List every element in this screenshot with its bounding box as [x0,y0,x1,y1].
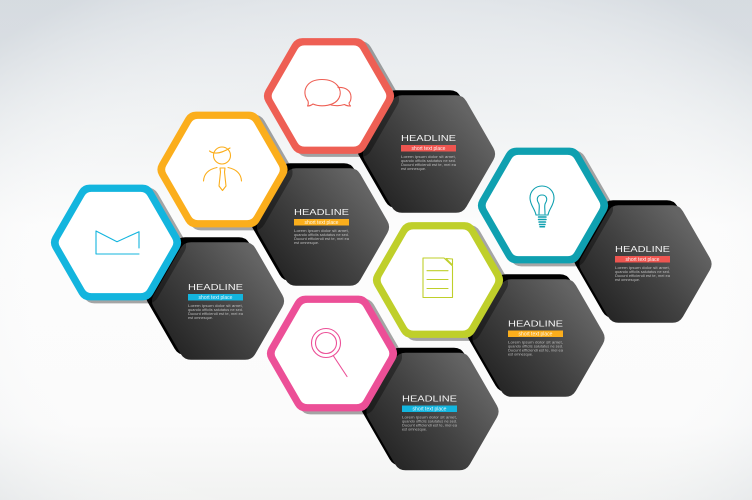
text: teal headline block: Lorem ipsum dolor sit amet, [615,266,670,270]
text: yellow headline block [294,208,349,245]
text: coral headline block: quando officiis salutatus ne sed. [401,159,456,163]
text: coral headline block: short text place [412,146,446,152]
text: pink headline block [402,394,457,431]
panel: coral hexagon with chat icon [276,50,387,145]
text: teal headline block: quando officiis salutatus ne sed. [615,270,670,274]
text: green headline block: Lorem ipsum dolor sit amet, [508,341,563,345]
text: pink headline block: Lorem ipsum dolor sit amet, [402,416,457,420]
panel: dark hexagon coral [369,102,483,201]
text: pink headline block: est omnesque. [402,427,427,431]
text: yellow headline block: Ducunt efficiendi est te, mei ea [294,237,349,241]
panel: yellow hexagon with person icon [170,124,280,218]
text: blue headline block [188,283,243,320]
text: coral headline block: Lorem ipsum dolor sit amet, [401,155,456,159]
panel: dark hexagon pink [373,360,486,458]
text: green headline block [508,320,563,356]
text: pink headline block: Ducunt efficiendi est te, mei ea [402,424,457,428]
panel: dark hexagon teal [586,212,700,311]
text: yellow headline block: est omnesque. [294,241,319,245]
icon: magnifying glass [312,328,347,376]
text: green headline block: quando officiis salutatus ne sed. [508,345,563,349]
text: coral headline block [401,134,456,171]
panel: dark hexagon yellow [263,175,377,274]
text: yellow headline block: HEADLINE [294,208,349,217]
text: teal headline block [615,245,670,282]
text: blue headline block: HEADLINE [188,283,243,292]
text: blue headline block: Ducunt efficiendi est te, mei ea [188,312,243,316]
text: teal headline block: Ducunt efficiendi est te, mei ea [615,274,670,278]
text: coral headline block: est omnesque. [401,167,426,171]
text: green headline block: HEADLINE [508,320,563,328]
text: coral headline block: HEADLINE [401,134,456,143]
text: coral headline block: Ducunt efficiendi est te, mei ea [401,163,456,167]
text: blue headline block: Lorem ipsum dolor sit amet, [188,304,243,308]
icon: chat bubbles [305,80,351,106]
text: teal headline block: est omnesque. [615,278,640,282]
text: green headline block: short text place [519,332,553,338]
text: yellow headline block: quando officiis salutatus ne sed. [294,233,349,237]
text: green headline block: est omnesque. [508,352,533,356]
panel: teal hexagon with lightbulb icon [490,160,601,254]
icon: document [423,258,452,298]
text: green headline block: Ducunt efficiendi est te, mei ea [508,348,563,352]
text: yellow headline block: Lorem ipsum dolor sit amet, [294,229,349,233]
text: yellow headline block: short text place [305,220,339,226]
panel: green hexagon with document icon [385,234,496,329]
icon: lightbulb [530,186,554,227]
panel: dark hexagon blue [158,249,272,348]
text: teal headline block: HEADLINE [615,245,670,254]
text: blue headline block: short text place [199,295,233,301]
icon: envelope [96,231,139,254]
text: blue headline block: quando officiis salutatus ne sed. [188,308,243,312]
text: pink headline block: HEADLINE [402,394,457,404]
panel: blue hexagon with mail icon [63,197,174,291]
text: teal headline block: short text place [626,257,660,263]
text: pink headline block: quando officiis salutatus ne sed. [402,420,457,424]
text: blue headline block: est omnesque. [188,316,213,320]
text: pink headline block: short text place [413,407,447,413]
panel: pink hexagon with search icon [279,308,390,402]
icon: person with tie [204,147,242,190]
panel: dark hexagon green [479,286,592,385]
